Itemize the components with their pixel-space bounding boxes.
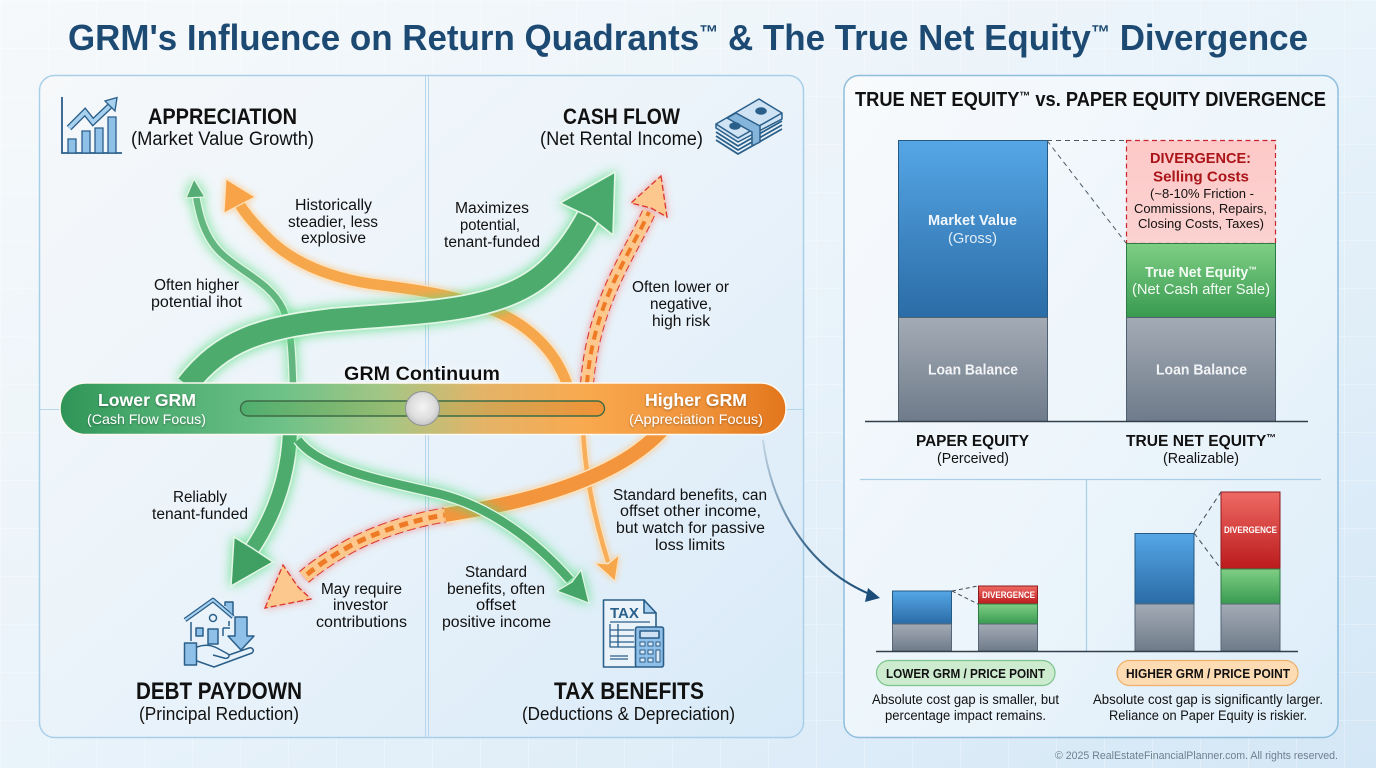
annotation: standard benefits passive loss limits — [613, 487, 767, 554]
bar chart: true net equity: (Net Cash after Sale) — [1132, 282, 1270, 298]
bar chart: true net equity: ™ — [1248, 265, 1257, 275]
icon: debt paydown house — [184, 600, 254, 667]
callout: divergence selling costs: Commissions, Repairs, — [1134, 201, 1267, 216]
heading: debt paydown — [136, 678, 302, 724]
text: higher GRM note: Absolute cost gap is significantly larger. — [1093, 692, 1323, 707]
title: & The True Net Equity — [718, 17, 1092, 58]
annotation: standard benefits passive loss limits: Standard benefits, can — [613, 487, 767, 504]
callout: divergence selling costs: DIVERGENCE: — [1150, 150, 1251, 167]
heading: appreciation — [131, 104, 314, 150]
annotation: historically steadier: explosive — [301, 230, 366, 247]
annotation: maximizes potential: Maximizes — [455, 200, 529, 217]
annotation: historically steadier — [288, 197, 378, 247]
callout: divergence selling costs: Closing Costs, Taxes) — [1138, 216, 1264, 231]
heading: tax benefits: TAX BENEFITS — [554, 678, 704, 705]
annotation: may require contributions: investor — [333, 597, 388, 614]
bar chart: paper equity: (Gross) — [948, 231, 997, 247]
annotation: standard benefits passive loss limits: loss limits — [655, 537, 725, 554]
arrow: lower GRM to appreciation — [186, 179, 293, 384]
mini chart: lower GRM — [892, 586, 1038, 651]
label: true net equity — [1126, 433, 1276, 467]
panel: return quadrants — [40, 76, 804, 738]
callout: divergence selling costs — [1134, 150, 1267, 231]
annotation: often lower or negative: negative, — [650, 296, 712, 313]
annotation: may require contributions: contributions — [316, 614, 407, 631]
icon: cash stack — [716, 99, 782, 154]
panel heading: ™ — [1019, 89, 1030, 103]
title: GRM's Influence on Return Quadrants — [68, 17, 728, 58]
arrow: link from higher GRM to lower GRM mini chart — [763, 440, 880, 602]
label: paper equity — [916, 433, 1029, 467]
annotation: often higher potential — [151, 277, 243, 311]
label: paper equity: PAPER EQUITY — [916, 433, 1029, 450]
panel heading: vs. PAPER EQUITY DIVERGENCE — [1030, 89, 1326, 111]
text: lower GRM note — [872, 692, 1059, 723]
annotation: historically steadier: Historically — [295, 197, 372, 214]
label: true net equity: TRUE NET EQUITY — [1126, 433, 1270, 450]
pill: lower GRM / price point: LOWER GRM / PRICE POINT — [886, 666, 1045, 681]
label: higher GRM: (Appreciation Focus) — [629, 411, 763, 427]
icon: appreciation chart — [62, 97, 122, 153]
annotation: standard benefits passive loss limits: but watch for passive — [616, 520, 765, 537]
annotation: may require contributions — [316, 581, 407, 631]
title: Divergence — [1110, 17, 1308, 58]
annotation: standard benefits positive income: benefits, often — [447, 581, 545, 598]
text: lower GRM note: Absolute cost gap is smaller, but — [872, 692, 1059, 707]
GRM continuum bar — [60, 383, 786, 434]
text: higher GRM note — [1093, 692, 1323, 723]
heading: tax benefits: (Deductions & Depreciation) — [522, 704, 735, 724]
label: higher GRM: Higher GRM — [645, 390, 747, 410]
label: true net equity: ™ — [1266, 433, 1276, 444]
annotation: reliably tenant-funded — [152, 489, 248, 523]
annotation: standard benefits passive loss limits: offset other income, — [620, 503, 761, 520]
arrow: higher GRM to tax benefits — [583, 430, 619, 581]
heading: cash flow: CASH FLOW — [563, 104, 680, 129]
mini chart: lower GRM: DIVERGENCE — [982, 590, 1035, 600]
annotation: often higher potential: Often higher — [154, 277, 239, 294]
annotation: often higher potential: potential ihot — [151, 294, 243, 311]
annotation: standard benefits positive income: Standard — [465, 564, 527, 581]
label: GRM continuum: GRM Continuum — [344, 363, 500, 385]
title: ™ — [1091, 22, 1110, 44]
arrow: lower GRM to cash flow — [187, 172, 615, 385]
slider knob — [406, 392, 440, 426]
annotation: maximizes potential: potential, — [460, 217, 520, 234]
label: lower GRM: (Cash Flow Focus) — [87, 411, 206, 427]
continuum slider track — [240, 401, 604, 416]
panel heading: TRUE NET EQUITY — [855, 89, 1035, 111]
label: true net equity: (Realizable) — [1163, 451, 1239, 467]
annotation: often lower or negative — [632, 279, 729, 330]
pill: lower GRM / price point — [876, 660, 1055, 686]
heading: cash flow — [540, 104, 703, 150]
annotation: standard benefits positive income: positive income — [442, 614, 551, 631]
bar chart: paper equity: Loan Balance — [928, 362, 1018, 378]
bar chart: paper equity — [898, 140, 1048, 422]
arrow: higher GRM to cash flow (risky) — [587, 176, 667, 384]
pill: higher GRM / price point — [1117, 660, 1298, 686]
annotation: standard benefits positive income: offset — [476, 597, 517, 614]
callout: divergence selling costs: (~8-10% Friction - — [1150, 186, 1254, 201]
annotation: standard benefits positive income — [442, 564, 551, 631]
bar chart: true net equity — [1126, 140, 1276, 422]
bar chart: paper equity: Market Value — [928, 213, 1017, 229]
heading: appreciation: (Market Value Growth) — [131, 129, 314, 150]
arrow: lower GRM to debt paydown — [231, 430, 290, 586]
heading: debt paydown: DEBT PAYDOWN — [136, 678, 302, 705]
copyright footer: © 2025 RealEstateFinancialPlanner.com. All rights reserved. — [1055, 750, 1338, 762]
panel: true net equity divergence — [844, 76, 1338, 738]
annotation: may require contributions: May require — [321, 581, 402, 598]
label: paper equity: (Perceived) — [937, 451, 1009, 467]
annotation: maximizes potential: tenant-funded — [444, 234, 540, 251]
pill: higher GRM / price point: HIGHER GRM / PRICE POINT — [1126, 666, 1290, 681]
arrow: lower GRM to tax benefits — [298, 440, 589, 603]
annotation: reliably tenant-funded: Reliably — [173, 489, 227, 506]
arrow: higher GRM to debt paydown (risky) — [265, 430, 662, 608]
icon: tax document and calculator: TAX — [610, 605, 639, 622]
mini chart: higher GRM: DIVERGENCE — [1224, 525, 1277, 535]
annotation: reliably tenant-funded: tenant-funded — [152, 506, 248, 523]
heading: cash flow: (Net Rental Income) — [540, 129, 703, 150]
bar chart: true net equity: Loan Balance — [1156, 362, 1247, 378]
heading: appreciation: APPRECIATION — [148, 104, 297, 129]
annotation: historically steadier: steadier, less — [288, 214, 378, 231]
heading: tax benefits — [522, 678, 735, 724]
label: higher GRM — [629, 390, 763, 427]
text: higher GRM note: Reliance on Paper Equity is riskier. — [1109, 708, 1307, 723]
annotation: often lower or negative: Often lower or — [632, 279, 729, 296]
bar chart: true net equity: True Net Equity — [1145, 265, 1251, 281]
callout: divergence selling costs: Selling Costs — [1153, 168, 1249, 186]
heading: debt paydown: (Principal Reduction) — [139, 704, 299, 724]
mini chart: higher GRM — [1135, 492, 1280, 651]
icon: tax document and calculator — [604, 600, 664, 667]
annotation: maximizes potential — [444, 200, 540, 251]
arrow: higher GRM to appreciation — [224, 179, 567, 384]
label: lower GRM — [87, 390, 206, 427]
annotation: often lower or negative: high risk — [652, 313, 710, 330]
label: lower GRM: Lower GRM — [98, 390, 196, 410]
divergence guide lines — [1047, 140, 1126, 243]
text: lower GRM note: percentage impact remains. — [885, 708, 1046, 723]
title: ™ — [699, 22, 718, 44]
